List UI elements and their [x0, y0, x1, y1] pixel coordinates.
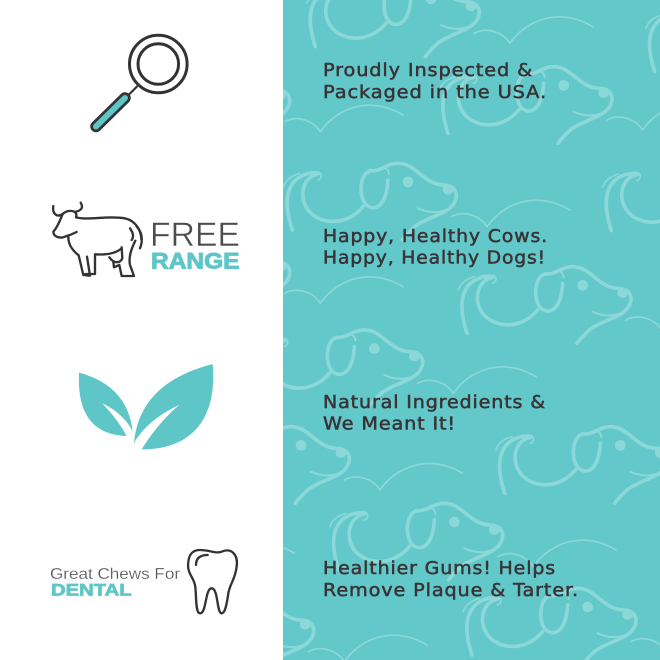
text block: inspected: [323, 60, 547, 103]
text: Great Chews For: Great Chews For: [50, 566, 181, 583]
text: FREE: FREE: [150, 216, 240, 254]
icon: leaves: [79, 364, 213, 449]
panel: teal patterned background: [283, 0, 660, 660]
text: RANGE: RANGE: [151, 248, 240, 273]
text block: cows: Happy, Healthy Cows.: [323, 226, 548, 247]
text block: ingredients: [323, 392, 546, 434]
text block: ingredients: We Meant It!: [323, 414, 456, 434]
text block: ingredients: Natural Ingredients &: [323, 392, 546, 413]
text block: cows: [323, 226, 548, 268]
icon: tooth: [188, 550, 237, 613]
text block: gums: Healthier Gums! Helps: [323, 558, 556, 579]
text block: inspected: Packaged in the USA.: [323, 82, 547, 103]
text: DENTAL: DENTAL: [51, 580, 132, 600]
icon: cow: [53, 203, 142, 276]
text block: gums: [323, 558, 579, 601]
text block: inspected: Proudly Inspected &: [323, 60, 533, 81]
text block: gums: Remove Plaque & Tarter.: [323, 580, 579, 601]
text block: cows: Happy, Healthy Dogs!: [323, 248, 546, 268]
icon: magnifying glass: [96, 35, 187, 127]
dog outline pattern: [283, 0, 660, 660]
